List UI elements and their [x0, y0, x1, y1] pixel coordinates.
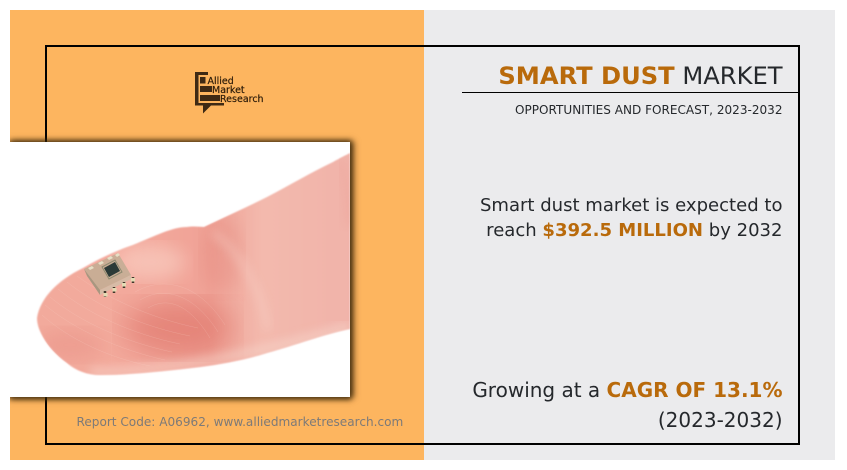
CAGR statement [472, 378, 782, 432]
finger shape [36, 153, 350, 375]
CAGR statement: Growing at a CAGR OF 13.1% [472, 378, 782, 402]
title: SMART DUST MARKET [498, 62, 782, 90]
market value statement: reach $392.5 MILLION by 2032 [486, 220, 782, 240]
market value statement: Smart dust market is expected to [480, 194, 782, 216]
photo: fingertip holding smart dust chip [10, 142, 350, 397]
panel: grey right background [424, 10, 835, 460]
logo: Allied Market Research: Market [212, 85, 245, 96]
title divider [462, 92, 798, 93]
market value statement [480, 194, 782, 240]
chip [84, 253, 135, 297]
subtitle: OPPORTUNITIES AND FORECAST, 2023-2032 [515, 103, 782, 117]
logo: Allied Market Research [195, 72, 264, 114]
logo: Allied Market Research: Allied [208, 76, 234, 87]
panel: orange left background [10, 10, 424, 460]
fingerprint ridges [42, 276, 225, 366]
black frame [45, 45, 800, 445]
logo: Allied Market Research: Research [220, 94, 264, 105]
report code: Report Code: A06962, www.alliedmarketresearch.com [76, 414, 403, 428]
CAGR statement: (2023-2032) [658, 408, 782, 432]
